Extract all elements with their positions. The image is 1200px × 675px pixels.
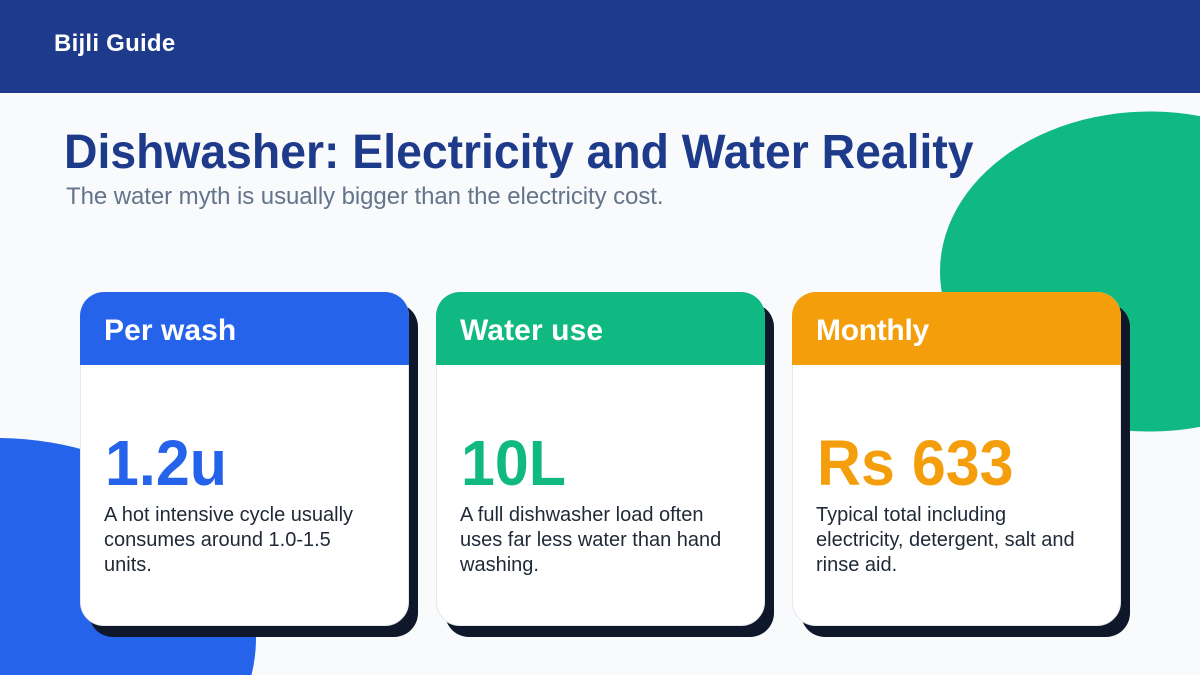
header band bbox=[0, 0, 1200, 93]
panel: monthly bbox=[792, 292, 1121, 626]
title: Dishwasher: Electricity and Water Reality bbox=[64, 126, 974, 179]
description: monthly: Typical total including electricity, detergent, salt and rinse aid. bbox=[816, 504, 1075, 576]
big number: 1.2u: 1.2u bbox=[105, 427, 227, 499]
subtitle: The water myth is usually bigger than the electricity cost. bbox=[66, 183, 663, 210]
card heading: water use: Water use bbox=[460, 314, 603, 347]
card heading: monthly: Monthly bbox=[816, 314, 929, 347]
description: water use: A full dishwasher load often uses far less water than hand washing. bbox=[460, 504, 721, 576]
big number: Rs 633: Rs 633 bbox=[817, 427, 1013, 499]
big number: 10L: 10L bbox=[461, 427, 566, 499]
card heading: per wash bbox=[80, 292, 409, 365]
panel: water use bbox=[436, 292, 765, 626]
card heading: water use bbox=[436, 292, 765, 365]
decorative shape: green ellipse bbox=[940, 112, 1200, 432]
panel: per wash bbox=[80, 292, 409, 626]
decorative shape: blue ellipse bbox=[0, 438, 256, 675]
card heading: monthly bbox=[792, 292, 1121, 365]
description: per wash: A hot intensive cycle usually consumes around 1.0-1.5 units. bbox=[104, 504, 353, 576]
card heading: per wash: Per wash bbox=[104, 314, 236, 347]
brand name: Bijli Guide bbox=[54, 30, 175, 57]
